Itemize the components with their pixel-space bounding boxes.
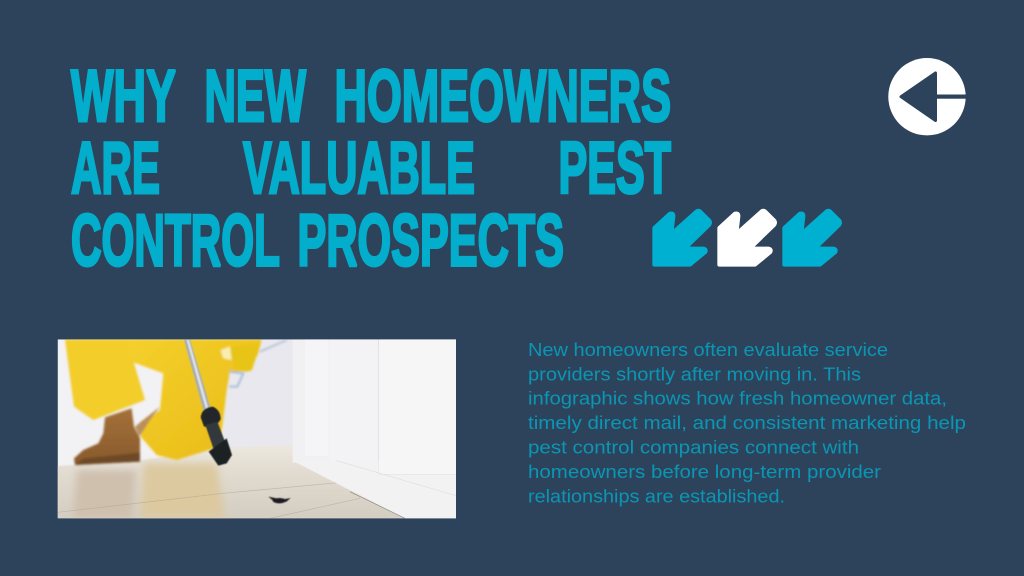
title (71, 54, 671, 282)
rear trouser leg (65, 339, 145, 420)
boot (74, 407, 160, 465)
sprayer wand (184, 339, 232, 466)
body text: New homeowners often evaluate service (528, 340, 888, 360)
hose (229, 372, 243, 387)
yellow suit (65, 339, 287, 460)
body text: providers shortly after moving in. This (528, 364, 861, 384)
title: ARE (71, 126, 160, 209)
icon: logo circle with left arrow (888, 58, 967, 135)
title: WHY (71, 54, 176, 137)
body text: infographic shows how fresh homeowner data, (528, 389, 947, 409)
floor reflections (140, 463, 225, 518)
floor (58, 445, 405, 518)
body text (528, 340, 966, 507)
title: CONTROL (71, 198, 280, 282)
arrow: cyan left (654, 211, 710, 265)
arrow: cyan right (784, 211, 840, 265)
front leg (125, 339, 262, 460)
title: PEST (558, 126, 671, 209)
body text: timely direct mail, and consistent marketing help (528, 413, 966, 433)
icon: three down-left arrows (654, 211, 840, 265)
body text: homeowners before long-term provider (528, 462, 881, 482)
title: HOMEOWNERS (334, 54, 671, 137)
bug on the floor (268, 497, 291, 503)
body text: relationships are established. (528, 487, 785, 507)
title: NEW (204, 54, 306, 137)
baseboard (293, 461, 456, 518)
back wall (58, 339, 456, 518)
title: VALUABLE (243, 126, 475, 209)
arrow: white middle (719, 211, 775, 265)
glove (230, 343, 261, 372)
photo: pest control technician spraying a bug (58, 339, 456, 518)
right wall panels (293, 339, 456, 463)
body text: pest control companies connect with (528, 438, 859, 458)
title: PROSPECTS (298, 198, 564, 282)
